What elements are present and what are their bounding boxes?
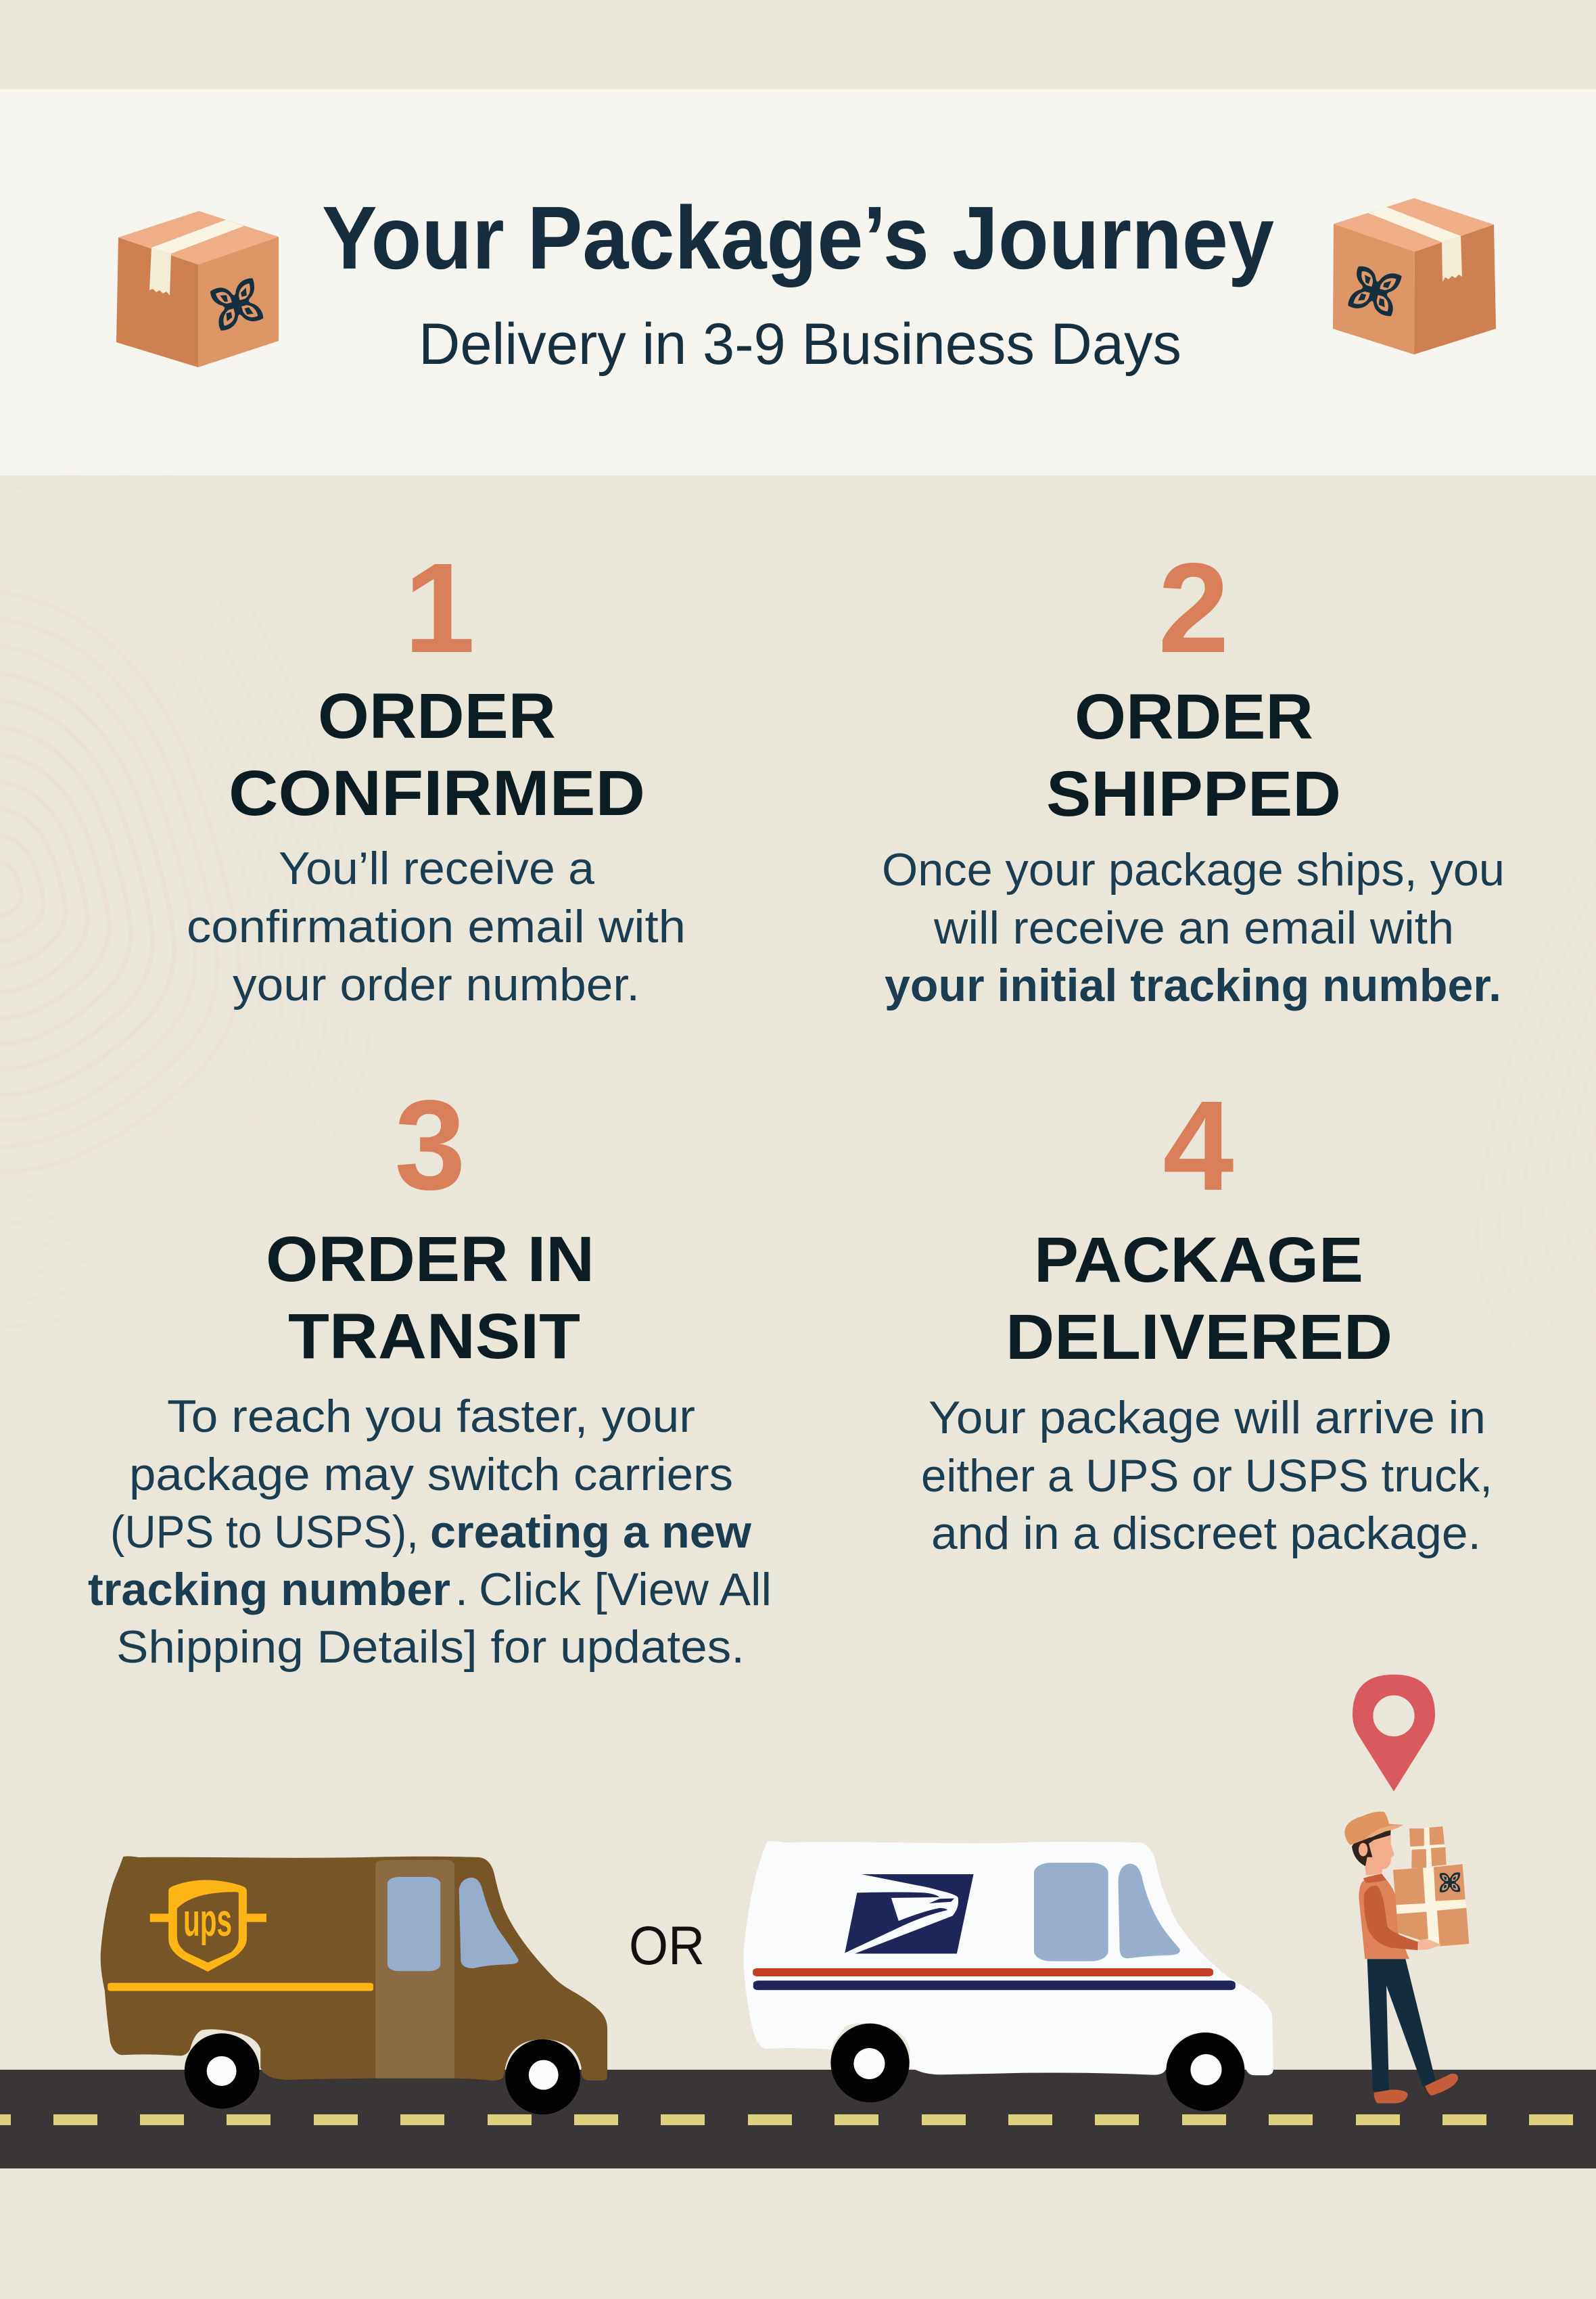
step number 3: 3 — [394, 1074, 466, 1217]
background contour pattern — [0, 402, 1596, 1579]
icon: UPS van — [101, 1856, 607, 2114]
panel: step 4 — [921, 1075, 1493, 1559]
step heading — [229, 680, 645, 829]
panel: step 2 — [882, 537, 1505, 1011]
step description: Your package will arrive in — [929, 1392, 1486, 1443]
step heading — [1006, 1224, 1392, 1373]
step description: (UPS to USPS), — [110, 1506, 419, 1558]
step heading: ORDER — [1075, 681, 1313, 753]
step number 4: 4 — [1163, 1075, 1234, 1217]
panel: step 3 — [88, 1074, 772, 1673]
step description: confirmation email with — [187, 901, 686, 952]
step description: Once your package ships, you — [882, 844, 1505, 896]
step description: will receive an email with — [933, 902, 1454, 954]
step description: and in a discreet package. — [931, 1508, 1481, 1559]
step heading: PACKAGE — [1034, 1224, 1363, 1296]
step description: your order number. — [233, 959, 640, 1011]
step description — [882, 844, 1505, 1011]
step heading: DELIVERED — [1006, 1301, 1392, 1373]
step description: . — [455, 1564, 468, 1615]
step description: tracking number — [88, 1564, 450, 1615]
step description: creating a new — [430, 1506, 752, 1558]
step description — [921, 1392, 1493, 1559]
step description — [187, 843, 686, 1011]
subtitle: Delivery in 3-9 Business Days — [419, 312, 1181, 377]
icon: USPS van — [743, 1841, 1273, 2111]
step heading: SHIPPED — [1046, 758, 1341, 830]
title: Your Package’s Journey — [322, 188, 1274, 287]
label: OR: OR — [629, 1915, 705, 1976]
step heading — [266, 1224, 594, 1372]
step description — [88, 1391, 772, 1673]
icon: right package box — [1333, 198, 1496, 354]
step description: Shipping Details] for updates. — [116, 1621, 745, 1673]
step number 2: 2 — [1158, 537, 1229, 680]
step heading: ORDER — [318, 680, 556, 752]
step heading: TRANSIT — [288, 1301, 580, 1372]
step heading: CONFIRMED — [229, 758, 645, 829]
step description: package may switch carriers — [129, 1449, 733, 1500]
panel: step 1 — [187, 537, 686, 1011]
step number 1: 1 — [404, 537, 475, 680]
panel: header band — [0, 89, 1596, 475]
icon: delivery person carrying boxes — [1344, 1811, 1469, 2104]
step heading: ORDER IN — [266, 1224, 594, 1295]
step description: either a UPS or USPS truck, — [921, 1450, 1493, 1502]
step heading — [1046, 681, 1341, 830]
UPS logo text: ups — [183, 1895, 232, 1946]
icon: left package box — [116, 211, 279, 367]
step description: You’ll receive a — [279, 843, 594, 894]
road — [0, 2070, 1596, 2168]
step description: To reach you faster, your — [167, 1391, 695, 1442]
icon: location pin — [1353, 1675, 1435, 1791]
step description: Click [View All — [479, 1564, 772, 1615]
step description: your initial tracking number. — [885, 960, 1501, 1011]
